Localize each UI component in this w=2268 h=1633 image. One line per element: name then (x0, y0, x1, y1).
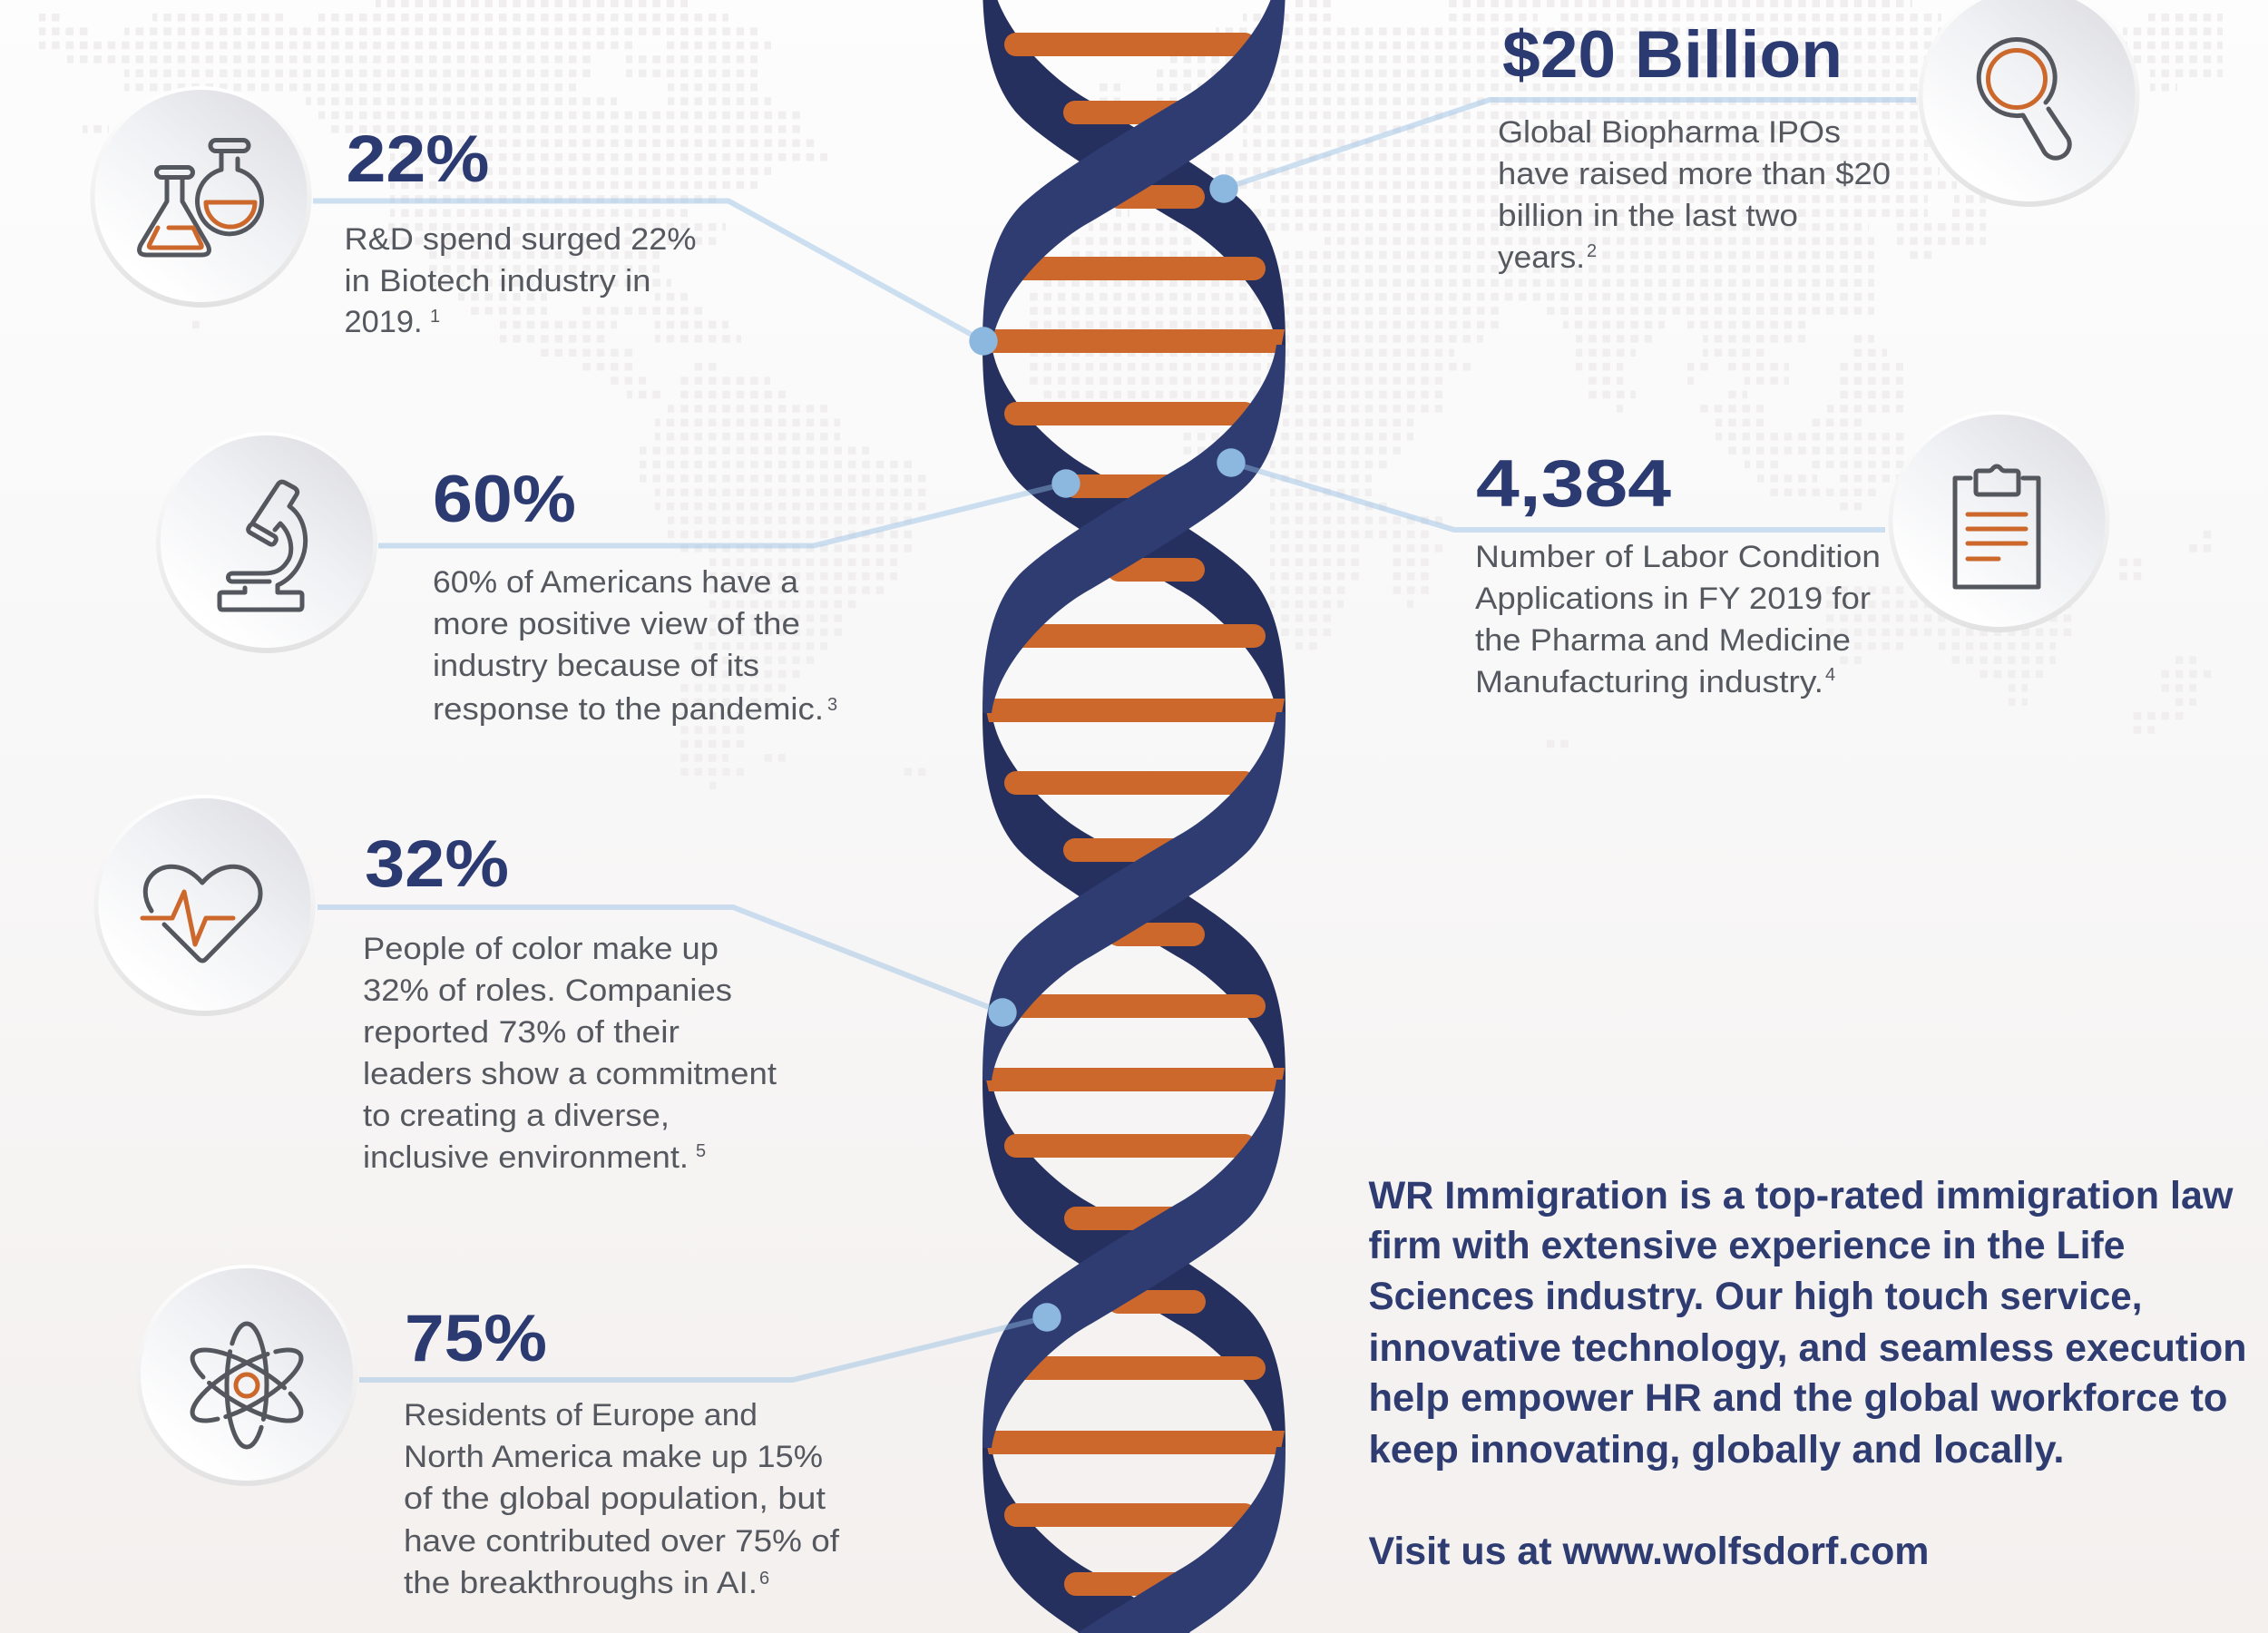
text block: 32% of roles. Companies (363, 973, 732, 1008)
panel: 22% stat (91, 86, 697, 339)
company description: keep innovating, globally and locally. (1368, 1428, 2065, 1472)
text block (345, 222, 697, 339)
DNA double helix (982, 0, 1286, 1633)
company description: Visit us at www.wolfsdorf.com (1368, 1530, 1929, 1573)
dotted world map (39, 4, 2223, 786)
headline: 32% (365, 827, 509, 901)
text block: 6 (759, 1569, 769, 1589)
text block: years. (1498, 240, 1585, 275)
text block: Global Biopharma IPOs (1498, 115, 1841, 150)
text block: of the global population, but (404, 1481, 826, 1516)
text block: billion in the last two (1498, 199, 1798, 233)
text block: 5 (696, 1141, 706, 1161)
panel: $20 Billion stat (1498, 0, 2139, 275)
text block: 2019. (345, 305, 423, 339)
front strand (982, 0, 1286, 1633)
text block (404, 1398, 840, 1600)
icon: flasks (91, 86, 312, 308)
headline: 60% (433, 463, 576, 536)
company description: innovative technology, and seamless execution (1368, 1326, 2246, 1370)
text block: reported 73% of their (363, 1015, 679, 1050)
panel: 75% stat (136, 1265, 840, 1600)
text block: the breakthroughs in AI. (404, 1566, 758, 1600)
text block: Residents of Europe and (404, 1398, 758, 1433)
icon: microscope (156, 432, 377, 653)
text block: 2 (1587, 241, 1597, 261)
connector dots (969, 174, 1246, 1332)
text block: Manufacturing industry. (1475, 665, 1823, 699)
panel: 60% stat (156, 432, 837, 727)
company description: firm with extensive experience in the Life (1368, 1224, 2125, 1267)
text block: North America make up 15% (404, 1440, 823, 1474)
text block: R&D spend surged 22% (345, 222, 697, 257)
text block: more positive view of the (433, 607, 800, 641)
text block: 1 (430, 307, 440, 327)
panel: 4,384 stat (1475, 411, 2110, 699)
text block: inclusive environment. (363, 1140, 689, 1175)
text block: have contributed over 75% of (404, 1524, 840, 1559)
text block: leaders show a commitment (363, 1057, 777, 1091)
company description: Sciences industry. Our high touch service, (1368, 1275, 2143, 1318)
icon: magnifying glass (1918, 0, 2139, 207)
text block (1498, 115, 1891, 275)
text block: Number of Labor Condition (1475, 540, 1881, 574)
headline: 75% (405, 1302, 547, 1375)
icon: heart with pulse (94, 795, 316, 1016)
headline: 4,384 (1476, 447, 1671, 521)
text block: in Biotech industry in (345, 264, 651, 298)
text block: industry because of its (433, 649, 759, 683)
company description: help empower HR and the global workforce to (1368, 1376, 2228, 1420)
text block: the Pharma and Medicine (1475, 623, 1851, 658)
icon: clipboard (1889, 411, 2110, 632)
company description: WR Immigration is a top-rated immigration law (1368, 1174, 2234, 1217)
connector lines (313, 100, 1916, 1380)
base pair rungs (986, 33, 1285, 1596)
headline: 22% (347, 122, 490, 196)
text block: 4 (1825, 665, 1835, 685)
icon: atom (136, 1265, 357, 1486)
text block (363, 932, 777, 1175)
back strand (982, 0, 1286, 1633)
text block (1475, 540, 1881, 699)
text block: 3 (827, 695, 837, 715)
text block: People of color make up (363, 932, 719, 966)
text block (433, 565, 837, 727)
headline: $20 Billion (1502, 18, 1843, 92)
text block: response to the pandemic. (433, 692, 824, 727)
text block: 60% of Americans have a (433, 565, 798, 600)
text block: have raised more than $20 (1498, 157, 1891, 191)
text block: to creating a diverse, (363, 1099, 670, 1133)
text block: Applications in FY 2019 for (1475, 582, 1871, 616)
company description (1368, 1174, 2246, 1573)
panel: 32% stat (94, 795, 777, 1175)
